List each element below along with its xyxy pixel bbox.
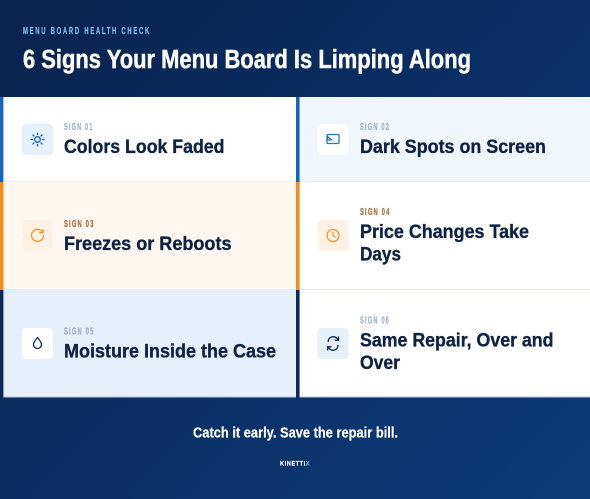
panel: sign 01 <box>0 97 296 182</box>
sign 02 heading: Dark Spots on Screen <box>360 136 546 158</box>
sign 04 label: SIGN 04 <box>360 206 390 218</box>
icon: water drop <box>22 328 53 359</box>
eyebrow label: MENU BOARD HEALTH CHECK <box>23 25 151 37</box>
footer logo: KINETTIX <box>280 460 310 468</box>
sign 01 label: SIGN 01 <box>64 121 94 133</box>
sign 03 heading: Freezes or Reboots <box>64 233 232 255</box>
panel: sign 06 <box>296 290 590 398</box>
icon: clock <box>318 220 348 251</box>
sign 04 heading: Days <box>360 244 401 266</box>
icon: sun <box>22 124 53 155</box>
icon: screen <box>318 124 348 155</box>
sign 06 heading: Same Repair, Over and <box>360 330 554 352</box>
sign 03 label: SIGN 03 <box>64 218 94 230</box>
sign 02 label: SIGN 02 <box>360 121 390 133</box>
panel: sign 02 <box>296 97 590 182</box>
sign 05 label: SIGN 05 <box>64 325 94 337</box>
icon: repeat arrows <box>318 328 348 359</box>
sign 06 label: SIGN 06 <box>360 314 390 326</box>
sign 06 heading <box>360 330 554 374</box>
panel: sign 03 <box>0 182 296 290</box>
sign 06 heading: Over <box>360 352 400 374</box>
footer tagline: Catch it early. Save the repair bill. <box>193 426 398 442</box>
sign 04 heading <box>360 221 529 266</box>
title: 6 Signs Your Menu Board Is Limping Along <box>23 46 471 74</box>
sign 04 heading: Price Changes Take <box>360 221 529 243</box>
sign 01 heading: Colors Look Faded <box>64 136 224 158</box>
panel: sign 05 <box>0 290 296 398</box>
panel: sign 04 <box>296 182 590 290</box>
sign 05 heading: Moisture Inside the Case <box>64 340 276 362</box>
icon: restart arrow <box>22 220 53 251</box>
